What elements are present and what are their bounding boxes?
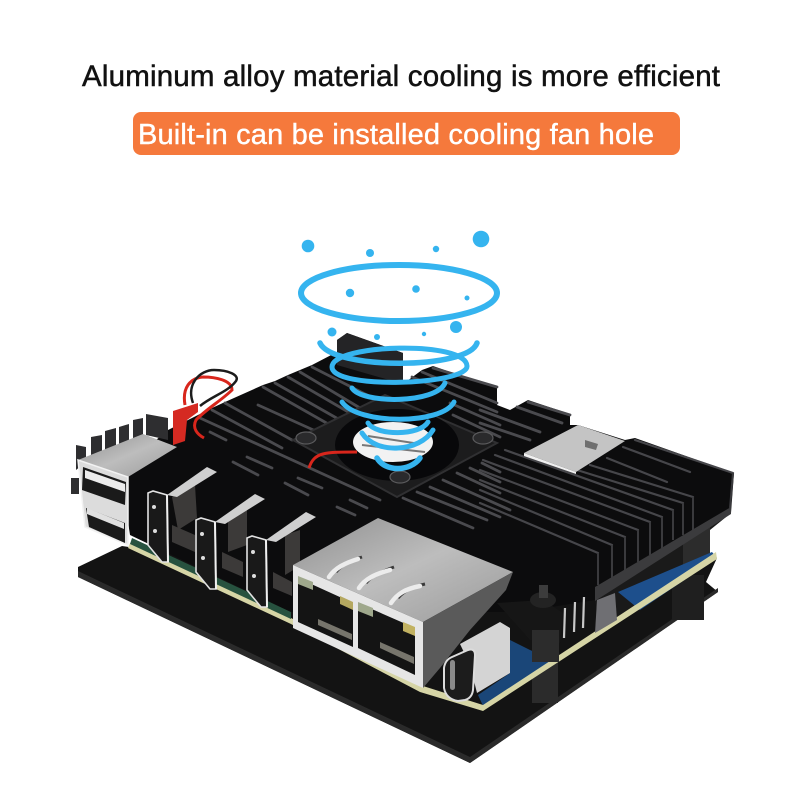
circuit board	[128, 538, 717, 711]
back and left fins	[200, 367, 570, 528]
HDMI fin blocks	[172, 485, 300, 596]
title: Aluminum alloy material cooling is more efficient	[82, 60, 720, 93]
subtitle pill: Built-in can be installed cooling fan hole	[138, 119, 654, 151]
dual Ethernet port	[293, 518, 513, 688]
USB-C port	[444, 622, 510, 701]
fan	[293, 395, 497, 497]
rear fin stubs beside USB	[71, 414, 168, 494]
fan wire	[309, 452, 357, 468]
HDMI port 2	[196, 494, 265, 589]
SD card slot	[524, 425, 625, 474]
power connector and wires	[173, 370, 237, 445]
standoffs	[532, 575, 704, 703]
dark space and standoff between heatsink and board	[595, 513, 731, 630]
label print	[362, 436, 425, 452]
fin end faces	[598, 473, 733, 585]
acrylic base plate	[78, 546, 718, 763]
front base strip of heatsink	[595, 507, 731, 601]
HDMI port 3	[247, 512, 316, 607]
airflow dots	[302, 231, 489, 340]
HDMI port 1	[148, 467, 217, 562]
metal latches	[329, 559, 420, 603]
USB port	[78, 434, 177, 545]
right side fins	[480, 440, 733, 553]
cooling airflow swirl	[301, 265, 497, 468]
latch slits	[336, 557, 425, 598]
screws	[296, 432, 493, 483]
heatsink	[71, 333, 734, 612]
tall rear fin block	[337, 333, 403, 384]
mounting post and pin header	[497, 585, 617, 662]
